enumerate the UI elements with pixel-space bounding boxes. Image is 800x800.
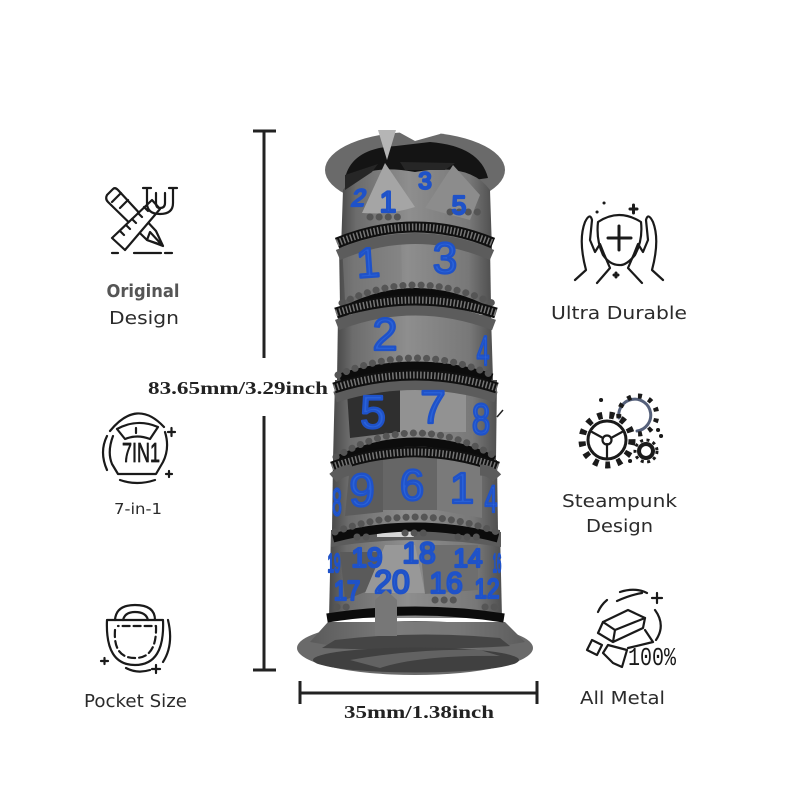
icon: metal bars and 100 percent: 100%: [628, 643, 676, 673]
top disc: [325, 130, 505, 208]
numbers on dice: 19: [351, 542, 383, 573]
numbers on dice: 19: [327, 550, 341, 578]
feature: pocket size: [84, 605, 187, 712]
ring 1: [337, 227, 493, 255]
numbers on dice: 2: [372, 309, 398, 360]
numbers on dice: 7: [420, 381, 446, 433]
numbers on dice: 1: [450, 464, 474, 513]
numbers on dice: 2: [349, 185, 369, 212]
label: all metal: All Metal: [580, 688, 665, 709]
height dimension label: 83.65mm/3.29inch: [148, 378, 328, 398]
numbers on dice: 3: [433, 234, 457, 283]
icon: pencil, ruler and magnet: [106, 188, 177, 253]
icon: gears: [582, 396, 661, 465]
icon: 7 in 1 dial: 7IN1: [122, 437, 160, 468]
feature: original design: [106, 188, 180, 329]
feature: 7-in-1: [103, 413, 175, 518]
ring 3: [334, 358, 497, 397]
feature: steampunk design: [562, 396, 678, 537]
tower segment 0: [341, 162, 492, 250]
numbers on dice: 1: [380, 186, 396, 219]
tower segment 5: [329, 530, 502, 618]
icon: pocket bag: [101, 605, 170, 673]
tower segment 3: [333, 380, 497, 460]
ring 5: [333, 517, 498, 538]
numbers on dice: 4: [485, 478, 497, 520]
label: ultra durable: Ultra Durable: [551, 303, 687, 324]
feature: all metal: [580, 590, 676, 709]
numbers on dice: 1: [355, 238, 381, 287]
label: pocket size: Pocket Size: [84, 691, 187, 712]
numbers on dice: 17: [334, 574, 360, 606]
label: design: Design: [586, 516, 653, 537]
numbers on dice: 18: [402, 537, 436, 570]
icon: hands and shield: [575, 203, 663, 283]
base post: [375, 590, 397, 636]
numbers on dice: 16: [429, 567, 463, 600]
label: original: Original: [106, 281, 180, 302]
label: design: Design: [109, 308, 179, 329]
numbers on dice: 8: [472, 396, 490, 444]
numbers on dice: 9: [349, 464, 375, 516]
small scratch mark: [497, 410, 503, 417]
label: steampunk: Steampunk: [562, 491, 678, 512]
numbers on dice: 8: [332, 481, 342, 524]
numbers on dice: 16: [493, 550, 501, 579]
label: 7-in-1: 7-in-1: [114, 500, 162, 518]
dice tower product: [297, 130, 533, 675]
facet panels: [331, 240, 501, 600]
ring 2: [336, 285, 496, 325]
numbers on dice: [327, 168, 501, 606]
width dimension arrow: [300, 681, 537, 704]
numbers on dice: 4: [477, 328, 489, 375]
numbers on dice: 3: [418, 168, 432, 195]
base: [297, 621, 533, 675]
ring 6: [327, 533, 504, 618]
numbers on dice: 14: [454, 543, 482, 573]
tower segment 1: [339, 245, 491, 305]
tower segment 4: [332, 460, 498, 530]
width dimension label: 35mm/1.38inch: [344, 702, 494, 722]
feature: ultra durable: [551, 203, 687, 324]
numbers on dice: 5: [452, 190, 466, 220]
numbers on dice: 20: [374, 564, 410, 600]
ring 4: [332, 433, 498, 478]
numbers on dice: 6: [400, 461, 424, 510]
numbers on dice: 5: [360, 386, 386, 438]
tower segment 2: [337, 315, 493, 380]
numbers on dice: 12: [475, 574, 499, 605]
height dimension arrow: [253, 131, 276, 670]
